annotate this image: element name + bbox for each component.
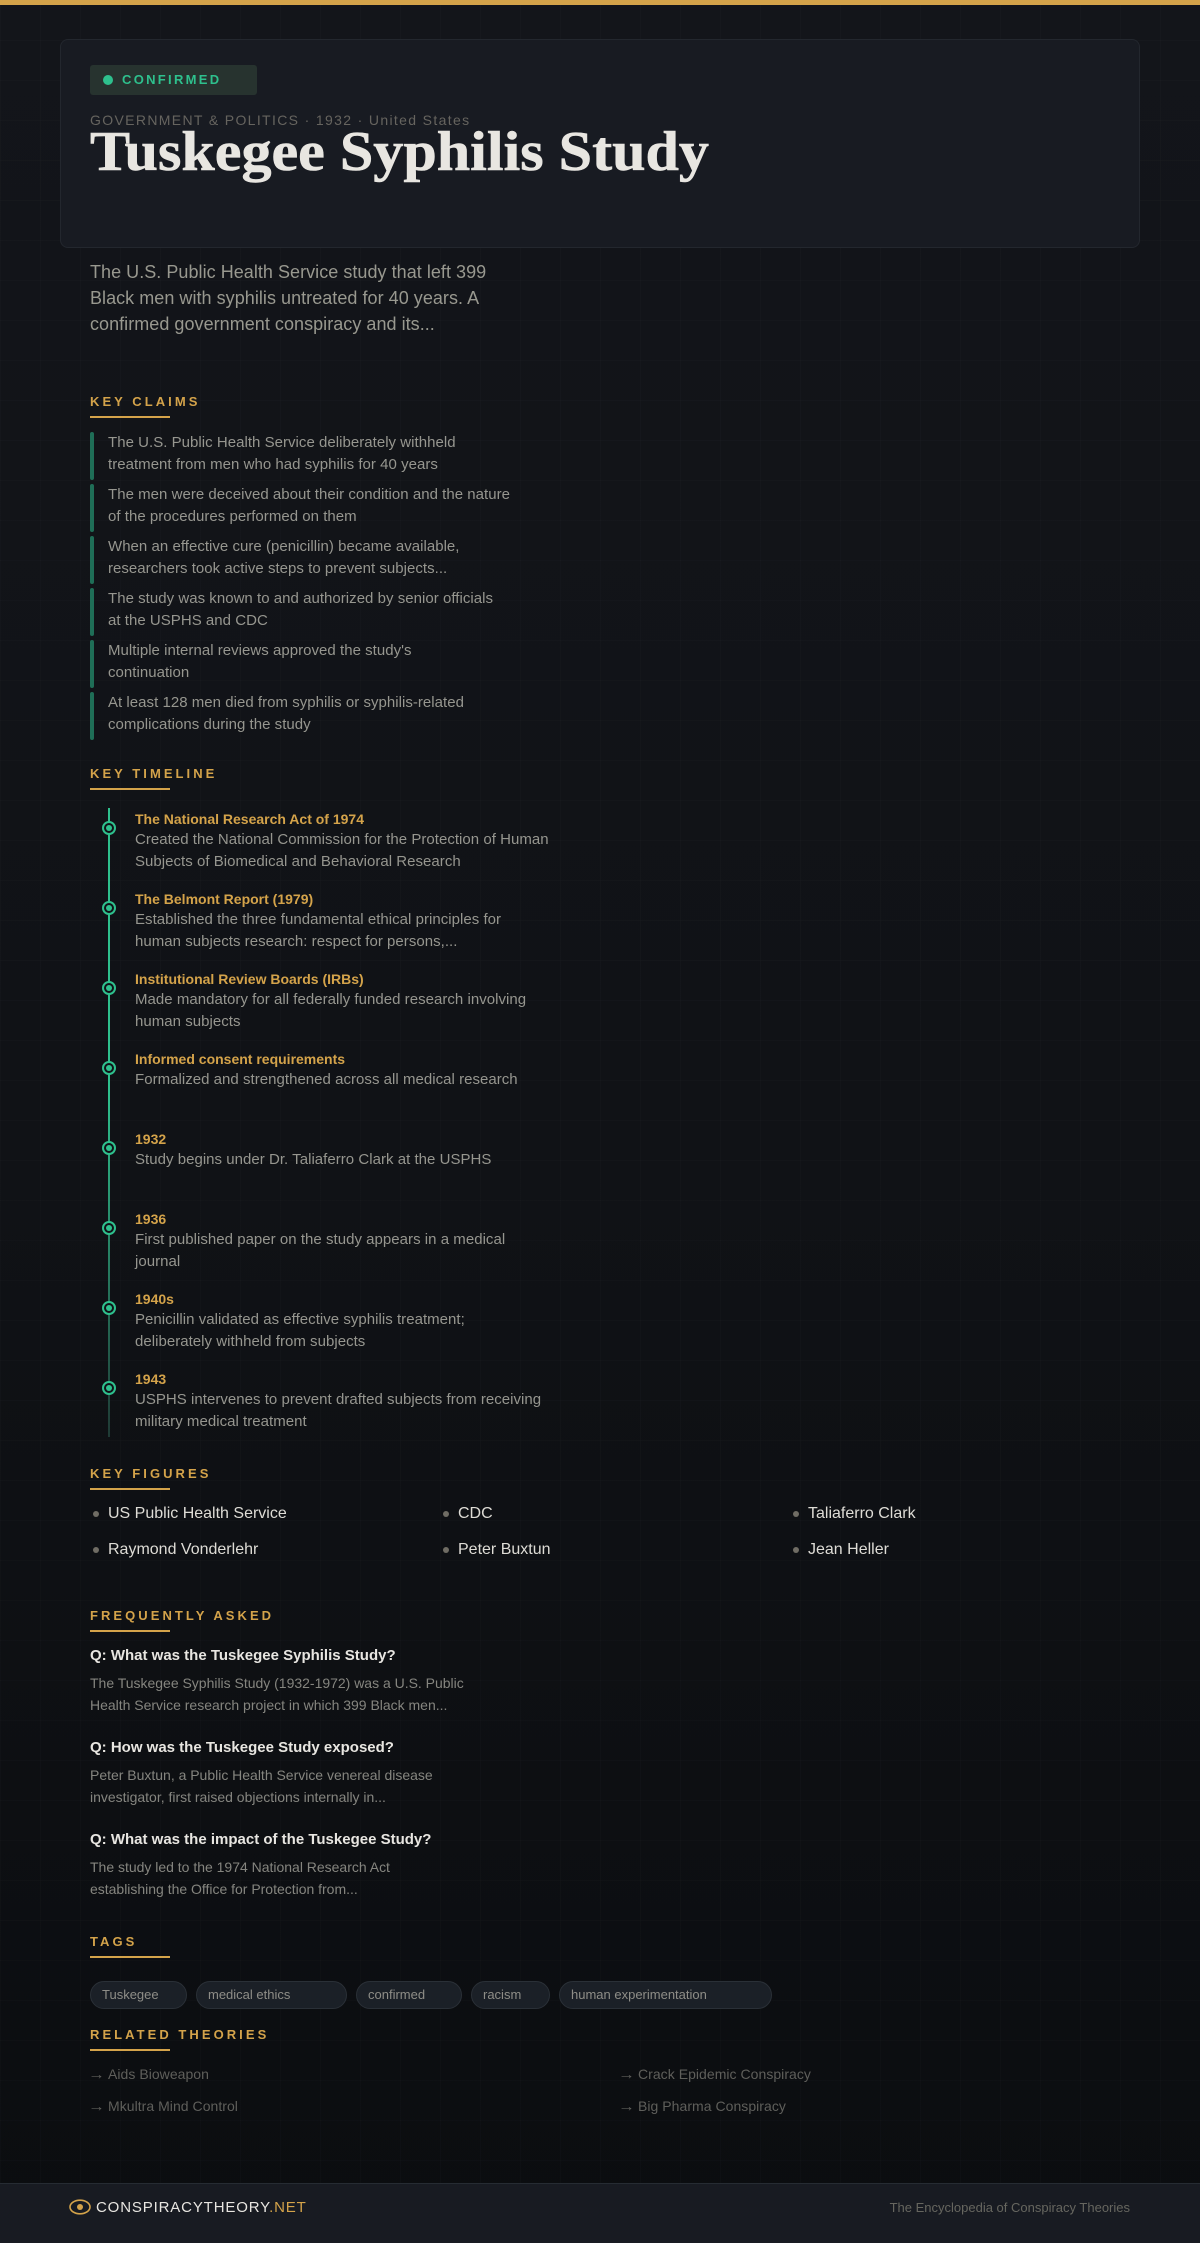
panel: key claims list xyxy=(90,432,510,740)
claim 3: researchers took active steps to prevent subjects... xyxy=(108,560,447,577)
event: 1932: Study begins under Dr. Taliaferro Clark at the USPHS xyxy=(135,1150,491,1168)
event: Belmont Report: The Belmont Report (1979) xyxy=(135,891,313,907)
related: Crack Epidemic Conspiracy: → xyxy=(618,2066,635,2082)
event: 1936: 1936 xyxy=(135,1211,166,1227)
claim 3 xyxy=(90,536,590,584)
claim 6: complications during the study xyxy=(108,716,311,733)
event: National Research Act: The National Research Act of 1974 xyxy=(135,811,364,827)
event: IRBs xyxy=(135,971,526,1030)
intro paragraph: Black men with syphilis untreated for 40 years. A xyxy=(90,288,479,308)
event: 1936 xyxy=(134,1211,505,1270)
heading: frequently asked: FREQUENTLY ASKED xyxy=(90,1608,274,1623)
tag: confirmed xyxy=(356,1981,462,2009)
tag: confirmed: confirmed xyxy=(368,1987,425,2002)
marker 1 xyxy=(102,821,116,835)
event: Belmont Report: Established the three fundamental ethical principles for xyxy=(135,910,501,928)
event: 1932: 1932 xyxy=(135,1131,166,1147)
event: 1936: First published paper on the study appears in a medical xyxy=(135,1230,505,1248)
title: Tuskegee Syphilis Study xyxy=(90,121,709,183)
icon: eye logo xyxy=(69,2199,91,2215)
event: 1932 xyxy=(135,1131,491,1168)
marker 6 xyxy=(102,1221,116,1235)
answer 2: investigator, first raised objections internally in... xyxy=(90,1789,386,1805)
event: 1940s: 1940s xyxy=(135,1291,174,1307)
figure: Taliaferro Clark: Taliaferro Clark xyxy=(808,1505,916,1522)
answer 3 xyxy=(90,1859,390,1897)
event: 1940s: deliberately withheld from subjects xyxy=(135,1332,365,1350)
answer 1 xyxy=(90,1675,464,1713)
claim 1: The U.S. Public Health Service deliberately withheld xyxy=(108,434,456,451)
related: Mkultra Mind Control: Mkultra Mind Control xyxy=(108,2098,238,2114)
event: Belmont Report xyxy=(135,891,501,950)
event: informed consent: Formalized and strengthened across all medical research xyxy=(135,1070,518,1088)
claim 1 xyxy=(90,432,590,480)
status badge xyxy=(90,65,257,95)
question 3: Q: What was the impact of the Tuskegee Study? xyxy=(90,1831,431,1848)
claim 2 xyxy=(90,484,590,532)
figure: CDC xyxy=(443,1505,493,1522)
event: IRBs: human subjects xyxy=(135,1012,240,1030)
footer tagline: The Encyclopedia of Conspiracy Theories xyxy=(890,2200,1130,2215)
claim 6: At least 128 men died from syphilis or syphilis-related xyxy=(108,694,464,711)
event: National Research Act: Created the National Commission for the Protection of Human xyxy=(135,830,549,848)
footer xyxy=(0,2183,1200,2243)
heading: key figures: KEY FIGURES xyxy=(90,1466,211,1481)
figure: Jean Heller: Jean Heller xyxy=(808,1541,889,1558)
heading: key claims: KEY CLAIMS xyxy=(90,394,200,409)
figure: US Public Health Service: US Public Health Service xyxy=(108,1505,287,1522)
marker 7 xyxy=(102,1301,116,1315)
tag: racism: racism xyxy=(483,1987,521,2002)
claim 4: The study was known to and authorized by senior officials xyxy=(108,590,493,607)
brand wordmark: CONSPIRACYTHEORY.NET xyxy=(96,2199,307,2216)
icon: status dot xyxy=(103,75,113,85)
related: Aids Bioweapon: Aids Bioweapon xyxy=(108,2066,209,2082)
event: 1943 xyxy=(135,1371,541,1430)
timeline markers xyxy=(102,821,116,1395)
answer 2: Peter Buxtun, a Public Health Service venereal disease xyxy=(90,1767,433,1783)
claim 4 xyxy=(90,588,590,636)
figure: CDC: CDC xyxy=(458,1505,493,1522)
heading: tags: TAGS xyxy=(90,1934,137,1949)
claim 5 xyxy=(90,640,590,688)
marker 4 xyxy=(102,1061,116,1075)
related: Aids Bioweapon: → xyxy=(88,2066,105,2082)
answer 3: The study led to the 1974 National Research Act xyxy=(90,1859,390,1875)
timeline line xyxy=(108,808,110,1437)
event: 1940s: Penicillin validated as effective syphilis treatment; xyxy=(135,1310,465,1328)
related: Big Pharma Conspiracy: → xyxy=(618,2098,635,2114)
tag: medical ethics xyxy=(196,1981,347,2009)
figure: Peter Buxtun: Peter Buxtun xyxy=(458,1541,550,1558)
question 1: Q: What was the Tuskegee Syphilis Study? xyxy=(90,1647,396,1664)
heading: related theories: RELATED THEORIES xyxy=(90,2027,269,2042)
intro paragraph: The U.S. Public Health Service study that left 399 xyxy=(90,262,486,282)
figure: Raymond Vonderlehr: Raymond Vonderlehr xyxy=(108,1541,258,1558)
event: IRBs: Institutional Review Boards (IRBs) xyxy=(135,971,364,987)
event: Belmont Report: human subjects research: respect for persons,... xyxy=(135,932,457,950)
claim 1: treatment from men who had syphilis for 40 years xyxy=(108,456,438,473)
claim 5: continuation xyxy=(108,664,189,681)
badge label: CONFIRMED xyxy=(122,72,221,87)
claim 5: Multiple internal reviews approved the study's xyxy=(108,642,412,659)
tag: Tuskegee: Tuskegee xyxy=(102,1987,159,2002)
tag: racism xyxy=(471,1981,550,2009)
event: 1936: journal xyxy=(135,1252,180,1270)
marker 5 xyxy=(102,1141,116,1155)
intro paragraph xyxy=(90,262,486,334)
event: IRBs: Made mandatory for all federally funded research involving xyxy=(135,990,526,1008)
event: 1943: USPHS intervenes to prevent drafted subjects from receiving xyxy=(135,1390,541,1408)
event: 1943: 1943 xyxy=(135,1371,166,1387)
answer 2 xyxy=(90,1767,433,1805)
marker 8 xyxy=(102,1381,116,1395)
question 2: Q: How was the Tuskegee Study exposed? xyxy=(90,1739,394,1756)
intro paragraph: confirmed government conspiracy and its... xyxy=(90,314,435,334)
claim 4: at the USPHS and CDC xyxy=(108,612,268,629)
related: Mkultra Mind Control: → xyxy=(88,2098,105,2114)
event: 1940s xyxy=(135,1291,465,1350)
claim 3: When an effective cure (penicillin) became available, xyxy=(108,538,460,555)
claim 2: The men were deceived about their condition and the nature xyxy=(108,486,510,503)
tag: human experimentation xyxy=(559,1981,772,2009)
tag: Tuskegee xyxy=(90,1981,187,2009)
event: National Research Act: Subjects of Biomedical and Behavioral Research xyxy=(135,852,461,870)
category meta line: GOVERNMENT & POLITICS · 1932 · United States xyxy=(90,112,470,128)
marker 2 xyxy=(102,901,116,915)
related: Crack Epidemic Conspiracy: Crack Epidemic Conspiracy xyxy=(638,2066,811,2082)
claim 6 xyxy=(90,692,590,740)
event: informed consent xyxy=(135,1051,518,1088)
event: 1943: military medical treatment xyxy=(135,1412,307,1430)
tag: medical ethics: medical ethics xyxy=(208,1987,290,2002)
related: Big Pharma Conspiracy: Big Pharma Conspiracy xyxy=(638,2098,786,2114)
top accent bar xyxy=(0,0,1200,5)
heading: key timeline: KEY TIMELINE xyxy=(90,766,217,781)
event: National Research Act xyxy=(135,811,549,870)
tag: human experimentation: human experimentation xyxy=(571,1987,707,2002)
panel: header xyxy=(60,39,1140,248)
claim 2: of the procedures performed on them xyxy=(108,508,357,525)
answer 1: Health Service research project in which 399 Black men... xyxy=(90,1697,447,1713)
marker 3 xyxy=(102,981,116,995)
answer 3: establishing the Office for Protection from... xyxy=(90,1881,358,1897)
answer 1: The Tuskegee Syphilis Study (1932-1972) was a U.S. Public xyxy=(90,1675,464,1691)
event: informed consent: Informed consent requirements xyxy=(135,1051,345,1067)
